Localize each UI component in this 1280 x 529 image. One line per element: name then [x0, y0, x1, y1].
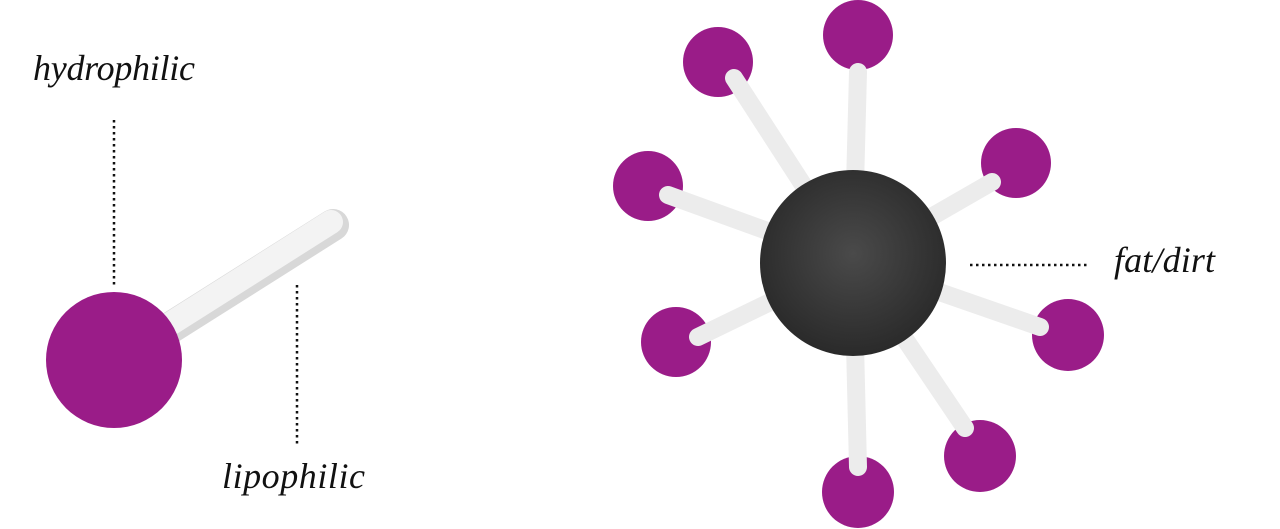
satellites [613, 0, 1104, 528]
label: hydrophilic: hydrophilic [33, 48, 195, 88]
lipophilic tail [170, 225, 333, 328]
micelle [613, 0, 1104, 528]
sticks [668, 72, 1040, 467]
fat/dirt core [760, 170, 946, 356]
label: lipophilic: lipophilic [222, 456, 365, 496]
label: fat/dirt: fat/dirt [1114, 240, 1216, 280]
hydrophilic head [46, 292, 182, 428]
left molecule [46, 222, 333, 428]
